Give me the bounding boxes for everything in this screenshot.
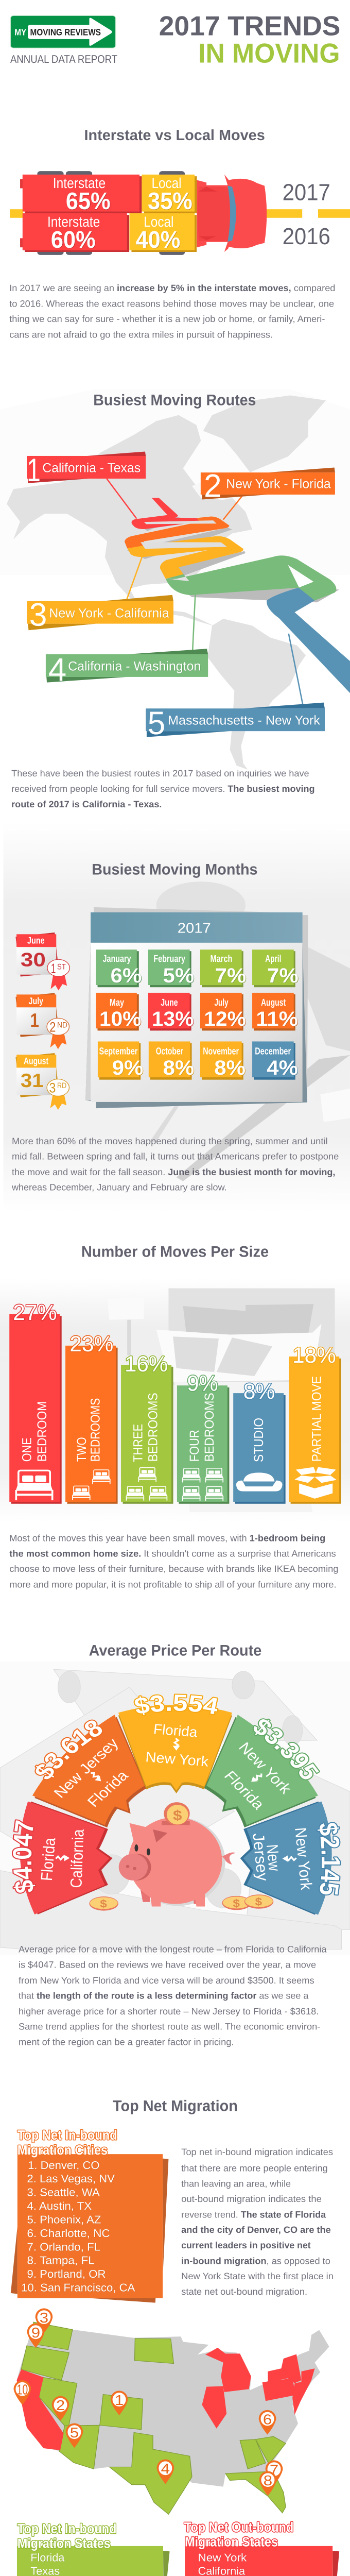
bar: three bedrooms: BEDROOMS <box>146 1393 160 1462</box>
icon: coins: $ <box>255 1895 262 1908</box>
panel: calendar: 8% <box>214 1057 246 1079</box>
bar: studio: STUDIO <box>251 1418 266 1462</box>
icon: bed <box>15 1470 53 1500</box>
bar: three bedrooms: THREE <box>131 1424 145 1462</box>
bar: one bedroom: 27% <box>13 1300 57 1325</box>
fan segment: New Jersey to Florida: New Jersey <box>50 1735 121 1801</box>
route ribbon <box>125 498 350 693</box>
panel: calendar: 2017 <box>178 920 211 936</box>
route label 3: 3 <box>29 596 47 633</box>
panel: top net inbound cities: 3. Seattle, WA <box>27 2186 100 2198</box>
map pins: 3 <box>40 2310 48 2326</box>
icon: coins: $ <box>100 1897 107 1910</box>
bar: two bedrooms: TWO <box>74 1437 89 1462</box>
panel: top net inbound cities: 9. Portland, OR <box>27 2268 106 2280</box>
panel: top net inbound cities: Top Net In-bound <box>18 2127 117 2143</box>
section: routes paragraph and months heading <box>11 768 314 809</box>
panel: calendar: February <box>153 953 185 964</box>
panel: calendar: September <box>99 1045 138 1057</box>
text: migration paragraph: that there are more people entering <box>181 2163 328 2173</box>
icon: piggy bank: $ <box>173 1807 182 1823</box>
fan segment: Florida to New York <box>118 1694 232 1793</box>
panel: top net inbound states: Florida <box>30 2551 65 2564</box>
text: migration paragraph: reverse trend. The state of Florida <box>181 2209 326 2219</box>
bar: three bedrooms: 16% <box>125 1351 168 1376</box>
calendar tiles: spring <box>96 950 295 1080</box>
fan segment: Florida to California: $4.047 <box>11 1819 36 1894</box>
bar: studio: 8% <box>243 1379 275 1403</box>
map pins: 4 <box>161 2461 170 2477</box>
panel: top net outbound states: Top Net Out-bound <box>184 2520 293 2535</box>
map pins: 5 <box>70 2425 79 2441</box>
section: price paragraph and migration <box>19 1944 327 2114</box>
icon: truck cab from above <box>197 174 267 252</box>
route label 1: California - Texas <box>42 461 141 475</box>
text: price paragraph: that the length of the route is a less determining factor as we see a <box>19 1990 309 2001</box>
panel: top net inbound cities <box>11 2127 168 2303</box>
text: moves per size paragraph: Most of the moves this year have been small moves, with 1-bedroom being <box>9 1533 325 1543</box>
map pins: 1 <box>115 2392 124 2408</box>
icon: coins <box>89 1894 273 1911</box>
fan segment: Florida to California: Florida <box>38 1837 59 1882</box>
panel: calendar: 9% <box>112 1057 143 1079</box>
chart: truck interstate vs local: 40% <box>136 226 180 253</box>
text: routes paragraph <box>11 768 314 809</box>
icon: two beds <box>72 1470 111 1500</box>
bar: partial move: 18% <box>292 1343 336 1367</box>
route label 5: Massachusetts - New York <box>168 713 320 727</box>
route label 2: New York - Florida <box>226 476 331 491</box>
second place month ribbon <box>15 993 69 1049</box>
text: migration paragraph: out-bound migration indicates the <box>181 2194 322 2204</box>
text: price paragraph: Same trend applies for the shortest route as well. The economic environ- <box>19 2021 320 2032</box>
chart: truck interstate vs local: Local <box>151 175 182 191</box>
icon: four beds <box>182 1468 223 1501</box>
panel: calendar <box>85 907 308 1108</box>
map pins: 6 <box>263 2412 272 2428</box>
panel: calendar: August <box>261 997 286 1008</box>
panel: calendar: July <box>214 997 229 1008</box>
icon: sofa <box>236 1472 283 1492</box>
bar: two bedrooms: 23% <box>69 1331 113 1356</box>
icon: piggy bank <box>119 1802 236 1907</box>
panel: top net inbound states: Top Net In-bound <box>18 2521 116 2536</box>
third place month ribbon <box>15 1053 69 1110</box>
fan segment: New York to New Jersey: New <box>263 1844 284 1872</box>
logo sign: MOVING REVIEWS <box>30 27 101 38</box>
background map of the Americas <box>0 389 350 770</box>
chart: truck interstate vs local: 2017 <box>283 179 330 205</box>
title <box>159 10 340 69</box>
background: months desk photo <box>4 822 350 1213</box>
in-bound states (green) <box>21 2322 286 2514</box>
text: months paragraph <box>12 1136 339 1193</box>
text: migration paragraph: New York State with the first place in <box>181 2271 334 2281</box>
panel: top net inbound cities: 8. Tampa, FL <box>27 2254 95 2266</box>
text: interstate paragraph line 1: In 2017 we are seeing an increase by 5% in the interstate moves, compared <box>9 283 335 293</box>
route label 4: California - Washington <box>68 659 201 673</box>
panel: calendar: 6% <box>111 964 142 987</box>
chart: truck interstate vs local: Interstate <box>47 214 100 230</box>
panel: calendar: October <box>156 1045 183 1057</box>
text: moves per size paragraph: the most common home size. It shouldn't come as a surprise that Americans <box>9 1548 336 1558</box>
route label 2: 2 <box>204 468 222 504</box>
text: migration paragraph: Top net in-bound migration indicates <box>181 2147 333 2157</box>
fan segment: New York to New Jersey: New York <box>291 1827 316 1891</box>
panel: top net inbound cities: 5. Phoenix, AZ <box>27 2213 101 2226</box>
text: migration paragraph: state net out-bound migration. <box>181 2286 307 2297</box>
panel: calendar: 8% <box>163 1057 194 1079</box>
fan segment: Florida to New York: Florida <box>153 1721 198 1740</box>
chart: truck interstate vs local <box>10 171 350 255</box>
bar: one bedroom: BEDROOM <box>34 1401 49 1462</box>
text: routes paragraph: These have been the busiest routes in 2017 based on inquiries we have <box>11 768 309 778</box>
logo sign <box>10 15 116 48</box>
chart: truck interstate vs local: Interstate <box>53 175 106 191</box>
chart: truck interstate vs local: 60% <box>51 226 96 253</box>
bar: four bedrooms <box>177 1371 229 1504</box>
route label 3 <box>27 595 173 633</box>
panel: calendar: January <box>102 953 131 964</box>
bar: partial move <box>289 1343 341 1504</box>
chart: truck interstate vs local: Local <box>144 214 173 230</box>
map pins: 9 <box>31 2325 40 2341</box>
panel: top net inbound cities: 2. Las Vegas, NV <box>27 2173 115 2185</box>
panel: calendar: 11% <box>256 1008 298 1030</box>
text: months paragraph: whereas December, January and February are slow. <box>12 1182 227 1193</box>
panel: calendar: 5% <box>163 964 194 987</box>
background: bedroom photo <box>0 1278 350 1522</box>
route label 3: New York - California <box>49 605 169 620</box>
panel: top net inbound cities: 10. San Francisco, CA <box>21 2281 135 2294</box>
map pins <box>13 2308 283 2496</box>
panel: calendar: June <box>161 997 178 1008</box>
fan segment: New Jersey to Florida: Florida <box>84 1767 132 1810</box>
first place month ribbon: ST <box>57 962 66 971</box>
fan segment: New York to Florida: New York <box>235 1739 295 1797</box>
bar: two bedrooms: BEDROOMS <box>88 1398 102 1462</box>
chart: truck interstate vs local: 65% <box>66 188 111 214</box>
text: migration paragraph <box>181 2147 334 2297</box>
chart: truck interstate vs local: 2016 <box>283 224 330 249</box>
panel: calendar: April <box>265 953 281 964</box>
heading: interstate vs local: Interstate vs Local Moves <box>84 127 265 143</box>
text: price paragraph: higher average price for a shorter route – New Jersey to Florida - $3618. <box>19 2006 319 2016</box>
icon: coins: $ <box>233 1897 240 1909</box>
heading: busiest moving months: Busiest Moving Months <box>92 860 257 878</box>
second place month ribbon: 2 <box>49 1020 56 1035</box>
third place month ribbon: RD <box>57 1081 66 1090</box>
fan segment: New York to Florida: Florida <box>221 1768 268 1812</box>
route label 4: 4 <box>48 652 66 688</box>
second place month ribbon: ND <box>57 1021 67 1029</box>
panel: calendar: 10% <box>99 1008 142 1030</box>
panel: top net inbound cities: 6. Charlotte, NC <box>27 2227 110 2239</box>
text: price paragraph: ment of the region can be a greater factor in pricing. <box>19 2037 234 2047</box>
logo sign: MY <box>14 27 26 38</box>
text: migration paragraph: and the city of Denver, CO are the <box>181 2225 331 2235</box>
route label 1: 1 <box>27 452 41 488</box>
icon: open box <box>294 1467 337 1499</box>
fan segment: Florida to California <box>11 1801 112 1914</box>
fan segment: New York to Florida: $3.395 <box>252 1718 320 1781</box>
first place month ribbon: June <box>27 936 45 946</box>
third place month ribbon: 31 <box>21 1070 44 1091</box>
US map <box>13 2308 329 2514</box>
panel: calendar: May <box>110 997 124 1008</box>
fan segment: New York to New Jersey <box>240 1801 341 1915</box>
panel: calendar: 13% <box>152 1008 194 1030</box>
bar: four bedrooms: 9% <box>187 1371 218 1396</box>
fan segment: Florida to California: California <box>67 1829 87 1888</box>
bar: studio <box>233 1379 286 1504</box>
section: number of moves per size <box>0 1243 350 1522</box>
panel: top net outbound states <box>178 2520 339 2576</box>
panel: top net outbound states: New York <box>198 2551 247 2564</box>
icon: three beds <box>126 1468 167 1501</box>
bar: three bedrooms <box>121 1351 173 1504</box>
bar: two bedrooms <box>65 1331 118 1504</box>
text: moves per size paragraph <box>9 1533 338 1589</box>
panel: top net inbound cities: 1. Denver, CO <box>28 2159 99 2171</box>
bar: four bedrooms: BEDROOMS <box>202 1393 217 1462</box>
first place month ribbon <box>15 933 69 990</box>
map pins: 2 <box>56 2398 65 2413</box>
bar: one bedroom <box>9 1300 62 1504</box>
panel: calendar: 12% <box>204 1008 246 1030</box>
out-bound states (red) <box>17 2348 314 2450</box>
header <box>9 10 350 293</box>
panel: top net inbound cities: 7. Orlando, FL <box>27 2241 100 2253</box>
bar: four bedrooms: FOUR <box>187 1430 202 1462</box>
panel: top net inbound states: Migration States <box>18 2536 111 2551</box>
route label 2 <box>201 468 335 504</box>
heading: average price per route: Average Price Per Route <box>89 1641 261 1659</box>
text: price paragraph: from New York to Florida and vice versa will be around $3500. It seems <box>19 1975 314 1986</box>
fan segment: Florida to New York: New York <box>145 1749 209 1770</box>
annual data report subtitle: ANNUAL DATA REPORT <box>10 53 117 65</box>
panel: calendar: November <box>203 1045 239 1057</box>
route label 5 <box>146 703 325 741</box>
third place month ribbon: 3 <box>49 1080 56 1095</box>
text: price paragraph <box>19 1944 327 2047</box>
text: migration paragraph: current leaders in positive net <box>181 2240 311 2250</box>
map pins: 8 <box>264 2473 272 2488</box>
third place month ribbon: August <box>24 1056 48 1066</box>
section: busiest moving routes <box>0 298 350 770</box>
first place month ribbon: 30 <box>21 949 46 971</box>
text: interstate paragraph: cans are not afraid to go the extra miles in pursuit of happiness. <box>9 329 273 340</box>
text: interstate paragraph <box>9 298 334 340</box>
panel: calendar: 7% <box>215 964 246 987</box>
text: migration paragraph: in-bound migration, as opposed to <box>181 2256 330 2266</box>
fan segment: New Jersey to Florida: $3.618 <box>34 1720 103 1780</box>
chart: truck interstate vs local: 35% <box>148 188 192 214</box>
fan segment: New York to New Jersey: Jersey <box>249 1833 272 1882</box>
panel: top net inbound cities: 4. Austin, TX <box>27 2200 92 2212</box>
text: routes paragraph: route of 2017 is California - Texas. <box>11 799 162 809</box>
panel: calendar: 4% <box>267 1057 298 1079</box>
panel: top net inbound states <box>10 2521 170 2576</box>
panel: top net outbound states: Migration States <box>185 2534 278 2549</box>
text: price paragraph: is $4047. Based on the reviews we have received over the year, a move <box>19 1959 316 1970</box>
second place month ribbon: July <box>29 996 43 1006</box>
route label 4 <box>46 649 208 688</box>
panel: calendar: March <box>211 953 232 964</box>
section: average price per route <box>0 1533 350 1950</box>
fan segment: New York to New Jersey: $2.145 <box>316 1822 341 1896</box>
heading: busiest moving routes: Busiest Moving Routes <box>93 391 256 409</box>
route label 1 <box>27 452 146 488</box>
text: routes paragraph: received from people looking for full service movers. The busiest moving <box>11 784 314 794</box>
bar: partial move: PARTIAL MOVE <box>309 1376 324 1462</box>
panel: calendar: 7% <box>267 964 299 987</box>
heading: top net migration: Top Net Migration <box>113 2097 238 2114</box>
map pins: 7 <box>270 2462 278 2478</box>
map pins: 10 <box>17 2382 28 2398</box>
fan segment: New Jersey to Florida <box>32 1715 146 1828</box>
second place month ribbon: 1 <box>30 1009 39 1031</box>
heading: number of moves per size: Number of Moves Per Size <box>81 1243 269 1260</box>
route label 5: 5 <box>148 705 165 741</box>
fan segment: Florida to New York: $3.554 <box>134 1694 218 1716</box>
bar: one bedroom: ONE <box>20 1437 34 1462</box>
background: dollar bills <box>0 1662 350 1955</box>
fan segment: New York to Florida <box>204 1715 320 1828</box>
text: migration paragraph: than leaving an area, while <box>181 2178 291 2189</box>
text: months paragraph: the move and wait for the fall season. June is the busiest month for moving, <box>12 1166 335 1177</box>
panel: top net inbound cities: Migration Cities <box>18 2143 108 2158</box>
first place month ribbon: 1 <box>51 961 56 976</box>
panel: calendar: December <box>255 1045 291 1057</box>
route connector lines <box>107 479 304 708</box>
